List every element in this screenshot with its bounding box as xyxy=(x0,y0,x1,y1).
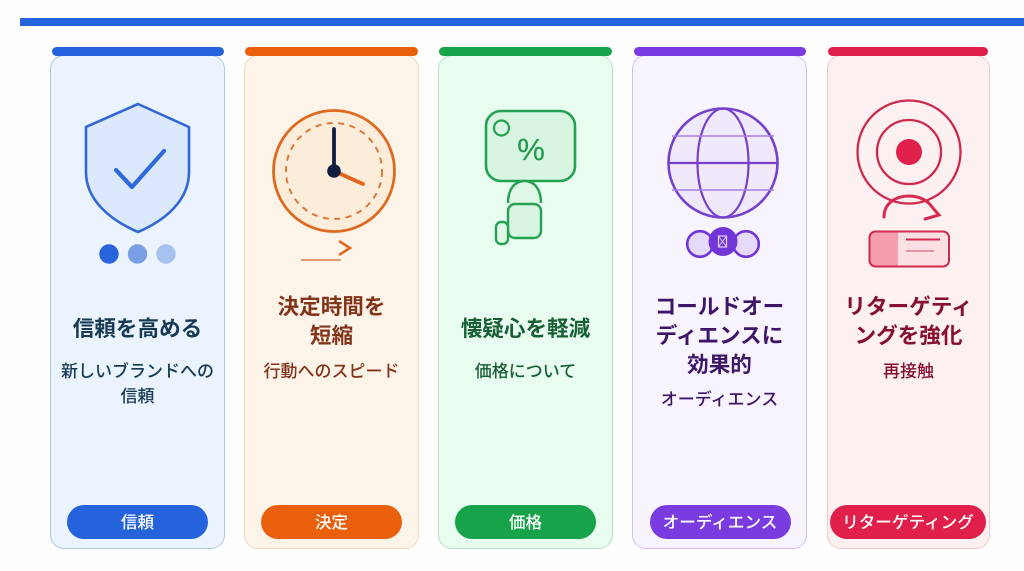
trust top strip xyxy=(52,47,224,56)
trust pill xyxy=(67,505,208,539)
audience description: オーディエンス xyxy=(661,390,778,409)
audience heading: ディエンスに xyxy=(656,323,783,348)
icon: shield with check xyxy=(84,102,190,264)
retargeting heading: ングを強化 xyxy=(854,323,962,348)
panel: retargeting xyxy=(827,47,990,549)
audience heading: コールドオー xyxy=(655,294,784,319)
price pill xyxy=(455,505,596,539)
price pill: 価格 xyxy=(509,513,542,532)
retargeting heading xyxy=(844,294,973,348)
decision heading xyxy=(278,294,385,348)
trust description: 新しいブランドへの xyxy=(61,362,214,381)
panel: cold audience xyxy=(632,47,807,549)
trust card background xyxy=(50,55,225,549)
price description: 価格について xyxy=(475,362,576,381)
trust description: 信頼 xyxy=(120,387,154,406)
decision heading: 決定時間を xyxy=(278,294,385,319)
icon: clock with arrow xyxy=(272,109,396,261)
icon: target with loop arrow and card xyxy=(856,99,962,268)
audience pill: オーディエンス xyxy=(663,513,777,532)
retargeting card background xyxy=(827,55,990,549)
retargeting pill xyxy=(830,505,986,539)
trust description xyxy=(61,362,214,406)
audience card background xyxy=(632,55,807,549)
price heading: 懐疑心を軽減 xyxy=(461,316,590,341)
decision heading: 短縮 xyxy=(310,323,353,348)
top accent bar xyxy=(20,18,1024,26)
trust heading: 信頼を高める xyxy=(73,316,202,341)
retargeting heading: リターゲティ xyxy=(844,294,973,319)
retargeting pill: リターゲティング xyxy=(842,513,974,532)
panel: trust xyxy=(50,47,225,549)
retargeting description: 再接触 xyxy=(883,362,934,381)
decision pill xyxy=(261,505,402,539)
icon: globe with connected circles xyxy=(667,107,779,258)
panel: decision xyxy=(244,47,419,549)
decision top strip xyxy=(245,47,418,56)
price top strip xyxy=(439,47,612,56)
trust pill: 信頼 xyxy=(121,513,154,532)
audience heading xyxy=(655,294,784,377)
decision description: 行動へのスピード xyxy=(264,362,400,381)
retargeting top strip xyxy=(828,47,988,56)
decision pill: 決定 xyxy=(315,513,348,532)
panel: price xyxy=(438,47,613,549)
audience heading: 効果的 xyxy=(687,352,752,377)
audience pill xyxy=(650,505,790,539)
audience top strip xyxy=(634,47,806,56)
price card background xyxy=(438,55,613,549)
decision card background xyxy=(244,55,419,549)
icon: price tag with hand xyxy=(484,110,576,246)
icon: price tag with hand: % xyxy=(517,132,545,167)
